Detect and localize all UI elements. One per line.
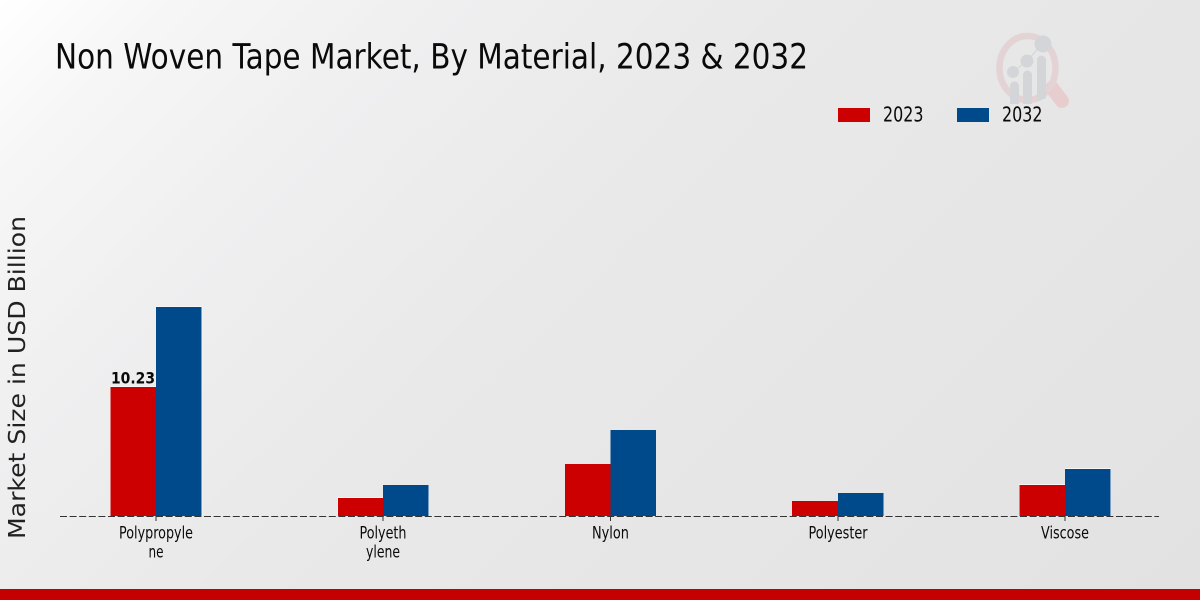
x axis labels: [119, 524, 1089, 562]
legend item: 2023: 2023: [883, 102, 924, 126]
label: Polyester: Polyester: [808, 524, 868, 542]
baseline axis: [60, 516, 1159, 518]
group: Viscose: [1019, 468, 1111, 516]
group: Polypropylene: 10.23: [111, 368, 155, 387]
legend item: 2023: [838, 102, 924, 126]
footer bar: [0, 589, 1200, 600]
legend item: 2032: [957, 102, 1042, 126]
icon: magnifier logo watermark: [1000, 36, 1062, 104]
label: Nylon: Nylon: [592, 524, 629, 542]
label: Polypropylene: Polypropyle: [119, 524, 193, 542]
legend: [838, 102, 1042, 126]
title: Non Woven Tape Market, By Material, 2023 & 2032: [55, 38, 808, 78]
group: Nylon: [565, 430, 656, 516]
group: Polypropylene: [110, 306, 202, 516]
bar chart: [60, 306, 1159, 521]
label: Polyethylene: ylene: [366, 542, 400, 562]
label: Polyethylene: Polyeth: [360, 524, 406, 542]
label: Polypropylene: ne: [148, 542, 164, 562]
label: Polypropylene: [119, 524, 193, 562]
legend item: 2032: 2032: [1002, 102, 1042, 126]
group: Polyethylene: [338, 485, 429, 516]
group: Polyester: [792, 493, 884, 516]
label: Viscose: Viscose: [1041, 524, 1089, 542]
y axis label: Market Size in USD Billion: [4, 216, 31, 539]
label: Polyethylene: [360, 524, 406, 562]
